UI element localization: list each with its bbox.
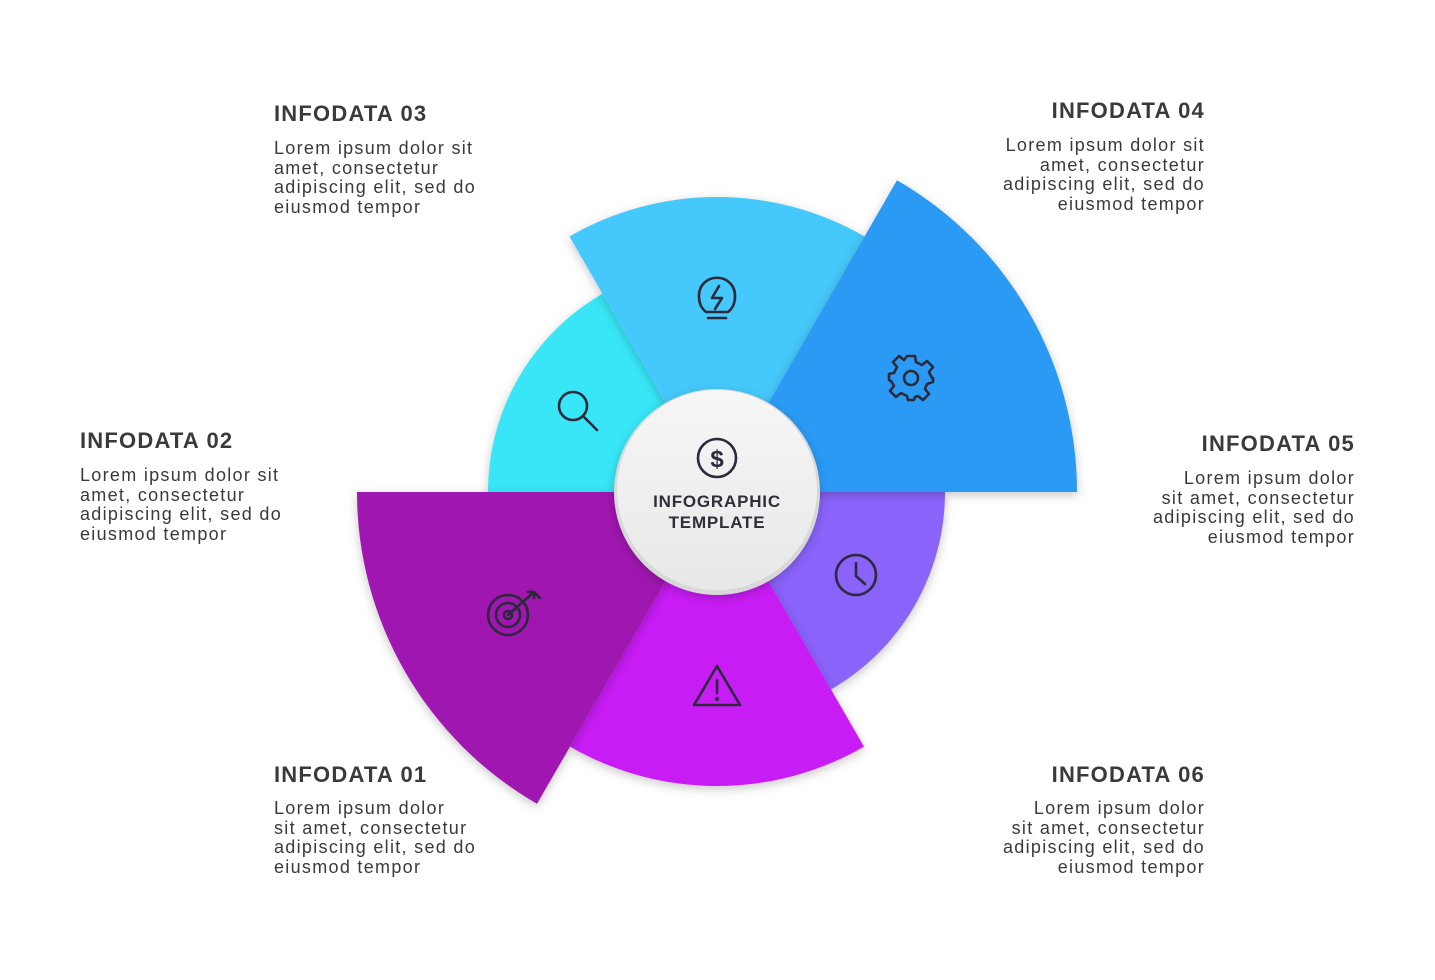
text: infodata 04 bbox=[1003, 98, 1205, 214]
icon: dollar: $ bbox=[710, 446, 724, 473]
text: infodata 02: amet, consectetur bbox=[80, 485, 245, 505]
icon: dollar bbox=[698, 439, 736, 477]
text: infodata 02: Lorem ipsum dolor sit bbox=[80, 465, 279, 485]
text: infodata 05: Lorem ipsum dolor bbox=[1184, 468, 1355, 488]
sector 02 bbox=[488, 294, 717, 492]
icon: gear bbox=[889, 356, 933, 400]
text: infodata 01: adipiscing elit, sed do bbox=[274, 837, 476, 857]
text: infodata 02: adipiscing elit, sed do bbox=[80, 504, 282, 524]
text: infodata 06: sit amet, consectetur bbox=[1012, 818, 1205, 838]
icon: target bbox=[488, 592, 540, 635]
sector 06 bbox=[570, 492, 864, 786]
text: infodata 04: Lorem ipsum dolor sit bbox=[1006, 135, 1205, 155]
text: infodata 05: sit amet, consectetur bbox=[1162, 488, 1355, 508]
sector 04 bbox=[717, 180, 1077, 492]
text: infodata 04: INFODATA 04 bbox=[1052, 98, 1205, 123]
text: infodata 02: eiusmod tempor bbox=[80, 524, 227, 544]
icon: search bbox=[559, 392, 597, 430]
text: infodata 03: amet, consectetur bbox=[274, 158, 439, 178]
text: infodata 04: adipiscing elit, sed do bbox=[1003, 174, 1205, 194]
text: infodata 01 bbox=[274, 762, 476, 877]
text: infodata 06: INFODATA 06 bbox=[1052, 762, 1205, 787]
text: infodata 06: eiusmod tempor bbox=[1058, 857, 1205, 877]
text: infodata 06: adipiscing elit, sed do bbox=[1003, 837, 1205, 857]
text: infodata 02: INFODATA 02 bbox=[80, 428, 233, 453]
text: infodata 05: INFODATA 05 bbox=[1202, 431, 1355, 456]
text: infodata 04: amet, consectetur bbox=[1040, 155, 1205, 175]
text: infodata 01: INFODATA 01 bbox=[274, 762, 427, 787]
text: infodata 03: adipiscing elit, sed do bbox=[274, 177, 476, 197]
sector 01 bbox=[357, 492, 717, 804]
center circle: TEMPLATE bbox=[669, 513, 765, 532]
text: infodata 03: eiusmod tempor bbox=[274, 197, 421, 217]
text: infodata 03 bbox=[274, 101, 476, 217]
text: infodata 01: eiusmod tempor bbox=[274, 857, 421, 877]
center label: INFOGRAPHIC bbox=[653, 492, 781, 511]
icon: warning bbox=[694, 666, 740, 705]
sector 03 bbox=[570, 197, 864, 492]
icon: bulb bbox=[699, 278, 735, 318]
text: infodata 05: eiusmod tempor bbox=[1208, 527, 1355, 547]
icon: clock bbox=[836, 555, 876, 595]
text: infodata 05 bbox=[1153, 431, 1355, 547]
sector 05 bbox=[717, 492, 945, 690]
text: infodata 03: Lorem ipsum dolor sit bbox=[274, 138, 473, 158]
text: infodata 05: adipiscing elit, sed do bbox=[1153, 507, 1355, 527]
text: infodata 04: eiusmod tempor bbox=[1058, 194, 1205, 214]
text: infodata 01: sit amet, consectetur bbox=[274, 818, 467, 838]
text: infodata 02 bbox=[80, 428, 282, 544]
text: infodata 06 bbox=[1003, 762, 1205, 877]
text: infodata 03: INFODATA 03 bbox=[274, 101, 427, 126]
center circle bbox=[614, 389, 820, 595]
text: infodata 01: Lorem ipsum dolor bbox=[274, 798, 445, 818]
text: infodata 06: Lorem ipsum dolor bbox=[1034, 798, 1205, 818]
